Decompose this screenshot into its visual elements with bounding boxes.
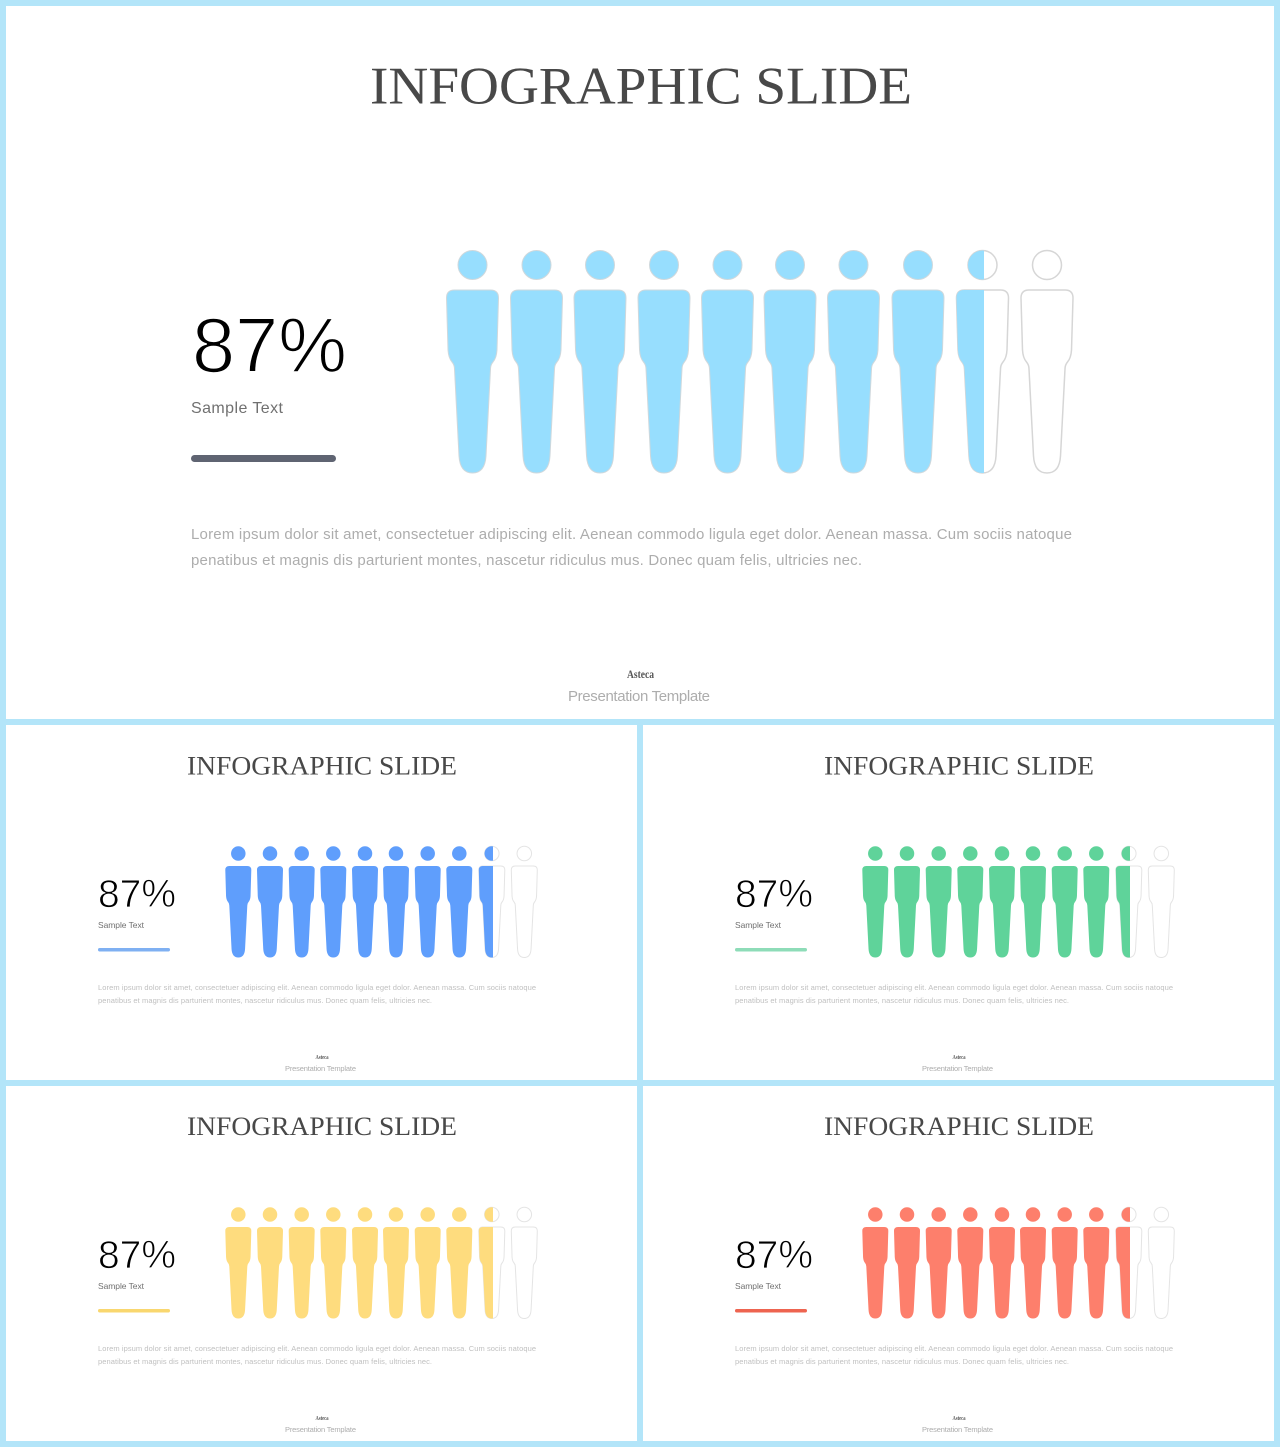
body paragraph: Lorem ipsum dolor sit amet, consectetuer adipiscing elit. Aenean commodo ligula eget dolor. Aenean massa. Cum sociis natoque (735, 983, 1173, 992)
percentage: 87% (735, 1234, 813, 1277)
body paragraph: Lorem ipsum dolor sit amet, consectetuer adipiscing elit. Aenean commodo ligula eget dolor. Aenean massa. Cum sociis natoque (735, 1344, 1173, 1353)
body paragraph: penatibus et magnis dis parturient montes, nascetur ridiculus mus. Donec quam felis, ultricies nec. (735, 1357, 1069, 1366)
footer: Presentation Template (922, 1425, 993, 1434)
accent bar (735, 948, 807, 952)
body paragraph: penatibus et magnis dis parturient montes, nascetur ridiculus mus. Donec quam felis, ultricies nec. (191, 552, 862, 569)
sample text label: Sample Text (191, 400, 284, 417)
accent bar (191, 455, 336, 462)
percentage: 87% (98, 873, 176, 916)
body paragraph (735, 983, 1173, 1005)
accent bar (98, 948, 170, 952)
pictogram: 87 percent of ten people (446, 250, 1073, 473)
footer (285, 1416, 356, 1434)
body paragraph: penatibus et magnis dis parturient montes, nascetur ridiculus mus. Donec quam felis, ultricies nec. (735, 996, 1069, 1005)
sample text label: Sample Text (735, 920, 782, 930)
sample text label: Sample Text (98, 920, 145, 930)
body paragraph (98, 1344, 536, 1366)
panel: green slide (643, 725, 1274, 1080)
title: INFOGRAPHIC SLIDE (187, 750, 457, 780)
body paragraph (98, 983, 536, 1005)
footer (568, 667, 710, 705)
title: INFOGRAPHIC SLIDE (370, 58, 912, 116)
body paragraph (735, 1344, 1173, 1366)
accent bar (98, 1309, 170, 1312)
panel: yellow slide (6, 1086, 637, 1441)
body paragraph (191, 526, 1072, 569)
big percentage: 87% (192, 301, 347, 389)
body paragraph: Lorem ipsum dolor sit amet, consectetuer adipiscing elit. Aenean commodo ligula eget dolor. Aenean massa. Cum sociis natoque (191, 526, 1072, 543)
footer (922, 1055, 993, 1073)
footer: Presentation Template (285, 1064, 356, 1073)
body paragraph: Lorem ipsum dolor sit amet, consectetuer adipiscing elit. Aenean commodo ligula eget dolor. Aenean massa. Cum sociis natoque (98, 983, 536, 992)
footer: Asteca (316, 1055, 328, 1061)
footer: Asteca (316, 1416, 328, 1422)
panel: red slide (643, 1086, 1274, 1441)
footer: Presentation Template (922, 1064, 993, 1073)
body paragraph: penatibus et magnis dis parturient montes, nascetur ridiculus mus. Donec quam felis, ultricies nec. (98, 996, 432, 1005)
pictogram (225, 1207, 537, 1318)
body paragraph: Lorem ipsum dolor sit amet, consectetuer adipiscing elit. Aenean commodo ligula eget dolor. Aenean massa. Cum sociis natoque (98, 1344, 536, 1353)
footer (285, 1055, 356, 1073)
percentage: 87% (735, 873, 813, 916)
pictogram (862, 1207, 1174, 1318)
title: INFOGRAPHIC SLIDE (187, 1111, 457, 1141)
percentage: 87% (98, 1234, 176, 1277)
pictogram (225, 846, 537, 958)
footer (922, 1416, 993, 1434)
sample text label: Sample Text (735, 1281, 782, 1291)
footer: Presentation Template (568, 688, 710, 705)
sample text label: Sample Text (98, 1281, 145, 1291)
title: INFOGRAPHIC SLIDE (824, 750, 1094, 780)
title: INFOGRAPHIC SLIDE (824, 1111, 1094, 1141)
panel: main slide (light blue) (6, 6, 1274, 719)
footer: Presentation Template (285, 1425, 356, 1434)
footer: Asteca (952, 1416, 966, 1422)
footer: Asteca (627, 667, 654, 681)
body paragraph: penatibus et magnis dis parturient montes, nascetur ridiculus mus. Donec quam felis, ultricies nec. (98, 1357, 432, 1366)
footer: Asteca (952, 1055, 966, 1061)
pictogram (862, 846, 1174, 958)
accent bar (735, 1309, 807, 1312)
panel: blue slide (6, 725, 637, 1080)
